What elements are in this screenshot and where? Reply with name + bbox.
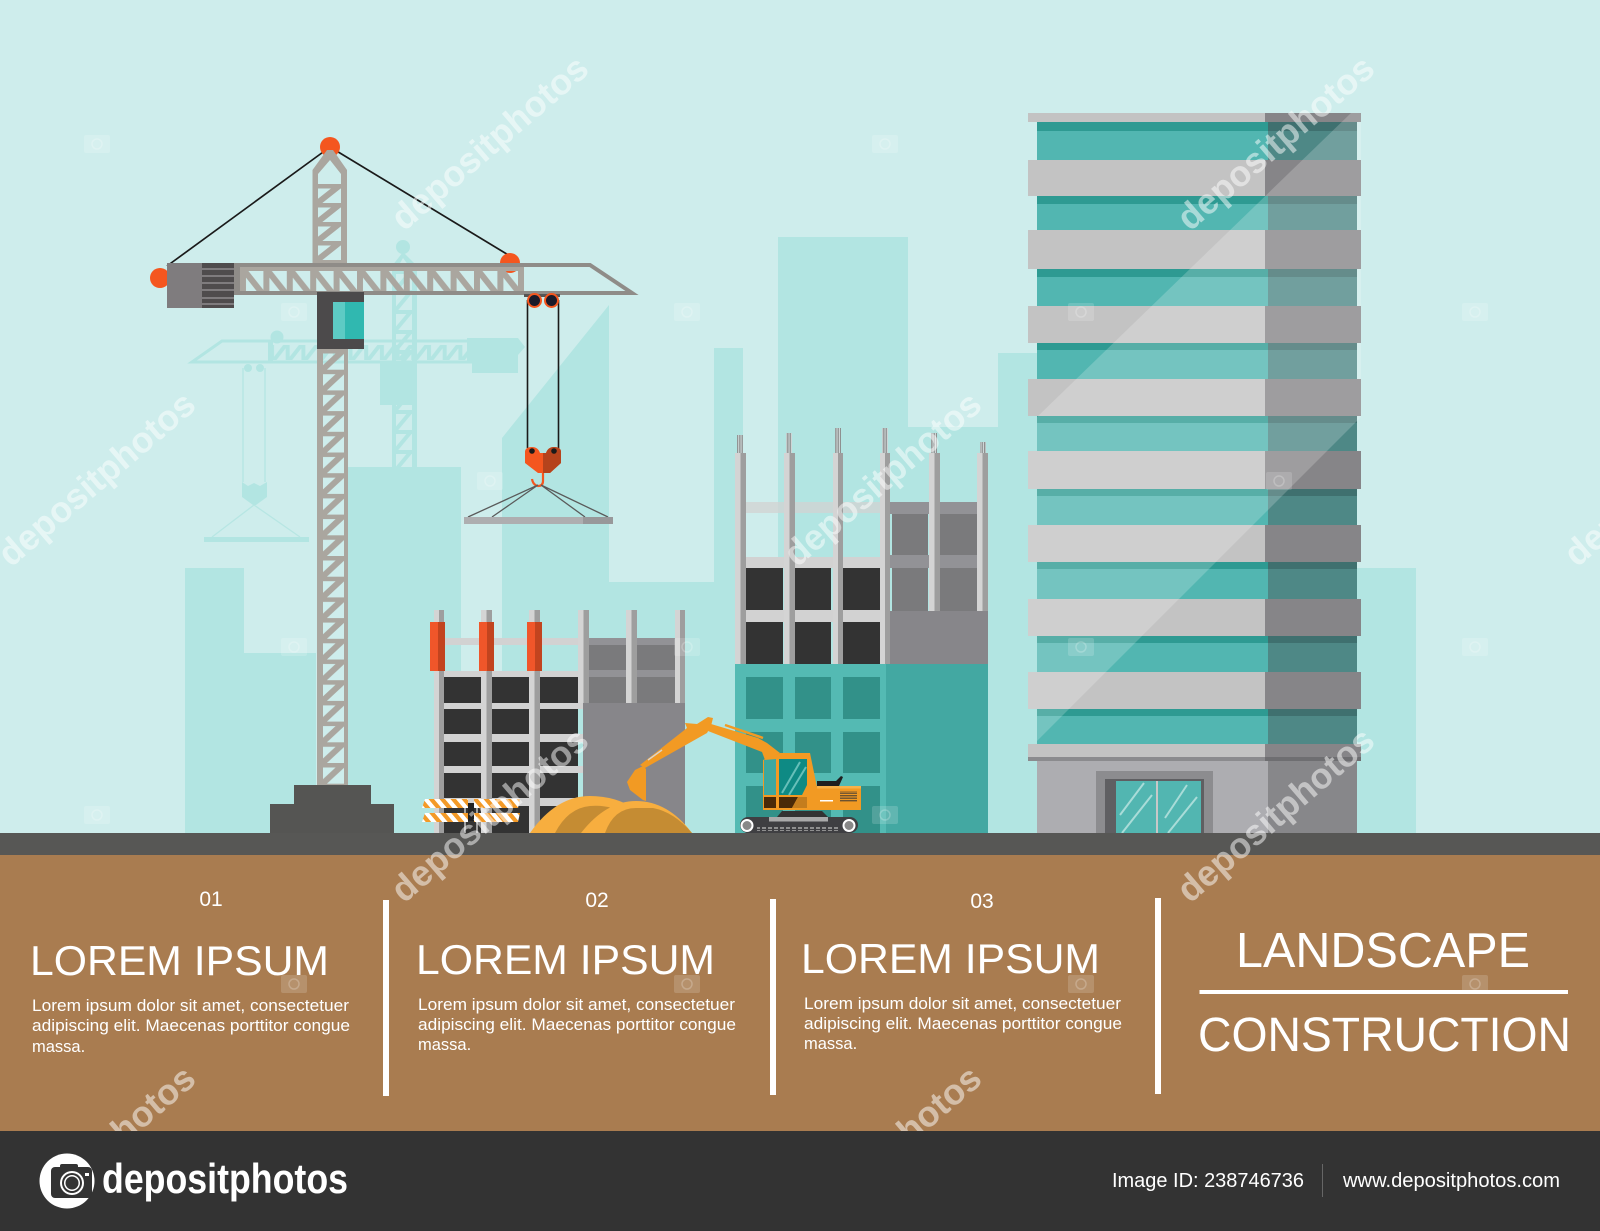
excavator tracks	[740, 811, 858, 833]
lobby storey	[1028, 757, 1361, 833]
sky background	[0, 0, 1600, 855]
column 02: 02	[585, 889, 609, 912]
pulleys and hoist cables	[524, 294, 560, 448]
lower mast	[317, 345, 348, 785]
background skyline	[185, 237, 1416, 833]
column 03: 03	[970, 890, 994, 913]
slab edge highlights	[1028, 451, 1037, 709]
excavator cab	[763, 753, 817, 810]
building under construction: left	[430, 610, 685, 833]
column 01: adipiscing elit. Maecenas porttitor congue	[32, 1017, 350, 1035]
crane base	[270, 785, 394, 834]
ground strip	[0, 833, 1600, 855]
column 02	[416, 889, 736, 1054]
counterweight	[167, 263, 234, 308]
column 03: adipiscing elit. Maecenas porttitor congue	[804, 1015, 1122, 1033]
background crane	[192, 240, 525, 542]
hook block	[525, 447, 561, 486]
excavator	[627, 717, 861, 833]
column 03: massa.	[804, 1035, 857, 1053]
column 01: massa.	[32, 1038, 85, 1056]
operator cab	[317, 292, 364, 349]
divider	[770, 899, 776, 1095]
building under construction: right	[735, 428, 988, 833]
brown info panel	[0, 855, 1600, 1131]
footer bar	[0, 1131, 1600, 1231]
site url: www.depositphotos.com	[1342, 1170, 1560, 1192]
footer separator	[1322, 1164, 1323, 1197]
column 02: Lorem ipsum dolor sit amet, consectetuer	[418, 996, 736, 1014]
divider	[1155, 898, 1161, 1094]
column 02: adipiscing elit. Maecenas porttitor congue	[418, 1016, 736, 1034]
title	[1198, 924, 1571, 1062]
watermark overlay: depositphotos	[1169, 47, 1382, 238]
tower crane	[150, 137, 632, 834]
glass reflection	[1037, 113, 1361, 741]
upper mast	[312, 150, 347, 263]
column 01: LOREM IPSUM	[30, 937, 329, 984]
glass floor shadow bands	[1037, 122, 1268, 716]
watermark overlay: depositphotos	[776, 383, 989, 574]
floor slabs	[1028, 113, 1265, 757]
title: CONSTRUCTION	[1198, 1009, 1571, 1062]
entrance door	[1096, 771, 1213, 833]
title: LANDSCAPE	[1236, 924, 1530, 978]
excavator engine	[817, 776, 861, 810]
column 03	[801, 890, 1122, 1053]
jib	[234, 263, 632, 295]
orange column sleeves	[430, 622, 542, 671]
side shadow bands	[1268, 122, 1357, 716]
excavator arm	[640, 717, 713, 768]
office tower	[1028, 113, 1361, 833]
column 01: 01	[199, 888, 223, 911]
column 01	[30, 888, 350, 1056]
column 02: massa.	[418, 1036, 471, 1054]
divider	[383, 900, 389, 1096]
watermark overlay: depositphotos	[1169, 719, 1382, 910]
sand piles	[530, 796, 692, 833]
icon: camera logo	[40, 1154, 94, 1208]
logo wordmark: depositphotos	[102, 1155, 348, 1202]
crane orange pivots	[150, 137, 520, 288]
column 02: LOREM IPSUM	[416, 936, 715, 983]
column 01: Lorem ipsum dolor sit amet, consectetuer	[32, 997, 350, 1015]
image id: Image ID: 238746736	[1112, 1170, 1304, 1192]
crane stay cables	[167, 147, 510, 266]
column 03: LOREM IPSUM	[801, 935, 1100, 982]
excavator bucket	[627, 766, 646, 801]
hanging slab	[464, 485, 613, 524]
excavator boom	[648, 724, 780, 760]
column 03: Lorem ipsum dolor sit amet, consectetuer	[804, 995, 1122, 1013]
watermark overlay: depositphotos	[383, 719, 596, 910]
slab sides	[1265, 113, 1361, 757]
watermark overlay: depositphotos	[383, 47, 596, 238]
road barrier	[422, 799, 520, 833]
